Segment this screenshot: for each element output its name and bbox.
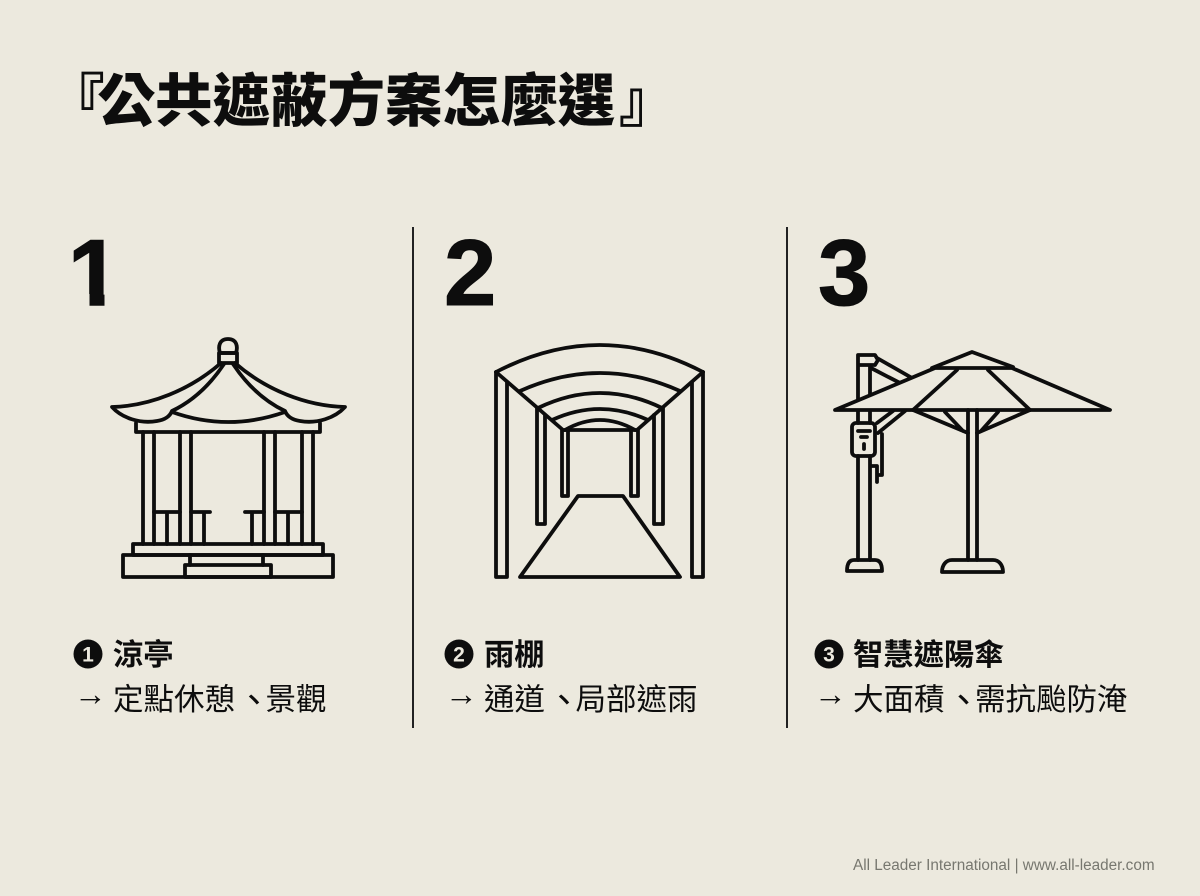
label: canopy use: 、 (546, 680, 582, 721)
icon: pavilion (112, 339, 345, 577)
label: umbrella heading: 智慧遮陽傘 (853, 638, 1004, 672)
label: canopy use: 局部遮雨 (576, 683, 698, 717)
label: pavilion use: 定點休憩 (113, 683, 235, 717)
label: pavilion heading: 1 (82, 644, 94, 666)
label: canopy use: → (445, 675, 478, 712)
label: pavilion heading (74, 638, 174, 672)
label: canopy heading (444, 638, 545, 672)
label: umbrella use: 需抗颱防淹 (975, 683, 1128, 717)
label: umbrella use: 、 (946, 680, 982, 721)
label: umbrella use: 大面積 (853, 683, 944, 717)
icon: canopy (496, 345, 703, 577)
panel: pavilion (68, 220, 345, 721)
panel: smart umbrella (814, 220, 1128, 721)
number 1: 1 (68, 220, 120, 325)
panel: canopy (444, 220, 703, 721)
label: pavilion use: 景觀 (266, 683, 327, 717)
label: umbrella use: → (814, 675, 847, 712)
label: canopy heading: 2 (453, 644, 465, 666)
label: canopy use: 通道 (484, 683, 545, 717)
label: pavilion use: → (74, 675, 107, 712)
number 2: 2 (444, 220, 496, 325)
footer credit: All Leader International | www.all-leader.com (853, 857, 1155, 874)
label: pavilion use: 、 (236, 680, 272, 721)
icon: smart umbrella (835, 352, 1110, 572)
label: umbrella heading: 3 (823, 644, 835, 666)
number 3: 3 (818, 220, 870, 325)
label: pavilion heading: 涼亭 (113, 638, 174, 672)
title: 『公共遮蔽方案怎麼選』 (47, 69, 676, 134)
label: canopy heading: 雨棚 (484, 638, 545, 672)
